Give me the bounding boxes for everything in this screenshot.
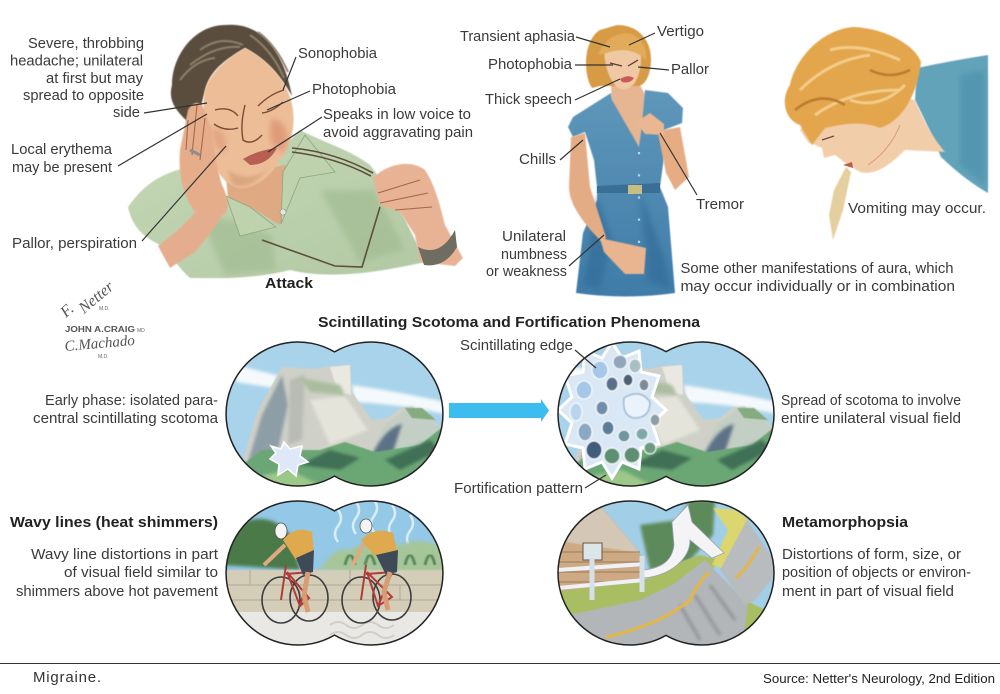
label: headache: [10, 36, 144, 121]
leader lines: attack: [118, 57, 322, 241]
shirt button: [280, 209, 286, 215]
face: [204, 48, 294, 188]
hair: [785, 27, 921, 145]
label: sonophobia: Sonophobia: [298, 46, 378, 62]
right arm: [658, 127, 689, 190]
signatures: M.D.: [98, 354, 109, 360]
facial features: [610, 60, 638, 66]
road texture: [680, 585, 735, 640]
trees: [222, 519, 300, 570]
label: pallor, perspiration: Pallor, perspiration: [12, 236, 137, 252]
text: wavy lines description: of visual field similar to: [64, 565, 218, 581]
label: spread of scotoma: Spread of scotoma to involve: [781, 393, 961, 409]
bangs: [598, 33, 646, 60]
hair strands: [800, 48, 905, 115]
lens: early scotoma: [225, 341, 444, 487]
neck and face: [800, 99, 945, 173]
leader lines: scotoma: [575, 350, 606, 488]
signatures: Netter: [75, 278, 118, 318]
panel: aura manifestations: [460, 24, 988, 296]
text: metamorphopsia description: ment in part of visual field: [782, 584, 954, 600]
label: photophobia: Photophobia: [312, 82, 397, 98]
buttons: [638, 152, 640, 272]
label: headache: spread to opposite: [23, 88, 144, 104]
label: chills: Chills: [519, 152, 556, 168]
panel: wavy lines: [10, 495, 450, 652]
label: headache: Severe, throbbing: [28, 36, 144, 52]
shrubs: [320, 541, 445, 575]
label: spread of scotoma: [781, 393, 961, 427]
label: thick speech: Thick speech: [485, 92, 572, 108]
signatures: JOHN A.CRAIG: [65, 325, 135, 334]
hair: [171, 25, 292, 122]
signatures: [57, 278, 145, 360]
figure title: Migraine.: [33, 669, 101, 686]
panel: metamorphopsia: [550, 495, 971, 652]
label: local erythema: Local erythema: [11, 142, 113, 158]
text: wavy lines description: [16, 547, 218, 600]
label: low voice: avoid aggravating pain: [323, 125, 473, 141]
source: Source: Netter's Neurology, 2nd Edition: [763, 672, 995, 686]
white rail: [644, 505, 724, 578]
caption: aura: Some other manifestations of aura, which: [680, 261, 954, 277]
label: unilateral numbness or weakness: or weakness: [486, 264, 567, 280]
signatures: MD: [137, 328, 145, 334]
cyclist one: [262, 523, 328, 623]
dress: [568, 90, 683, 296]
label: transient aphasia: Transient aphasia: [460, 29, 576, 45]
text: metamorphopsia description: Distortions of form, size, or: [782, 547, 961, 563]
belt: [597, 183, 660, 193]
label: vertigo: Vertigo: [657, 24, 704, 40]
left arm: [569, 133, 606, 244]
lens: cyclists: [225, 500, 444, 646]
lower hand: [600, 238, 646, 274]
dress: [915, 55, 988, 193]
label: photophobia: Photophobia: [488, 57, 573, 73]
illustration: standing woman in blue dress: [568, 25, 689, 296]
label: unilateral numbness or weakness: Unilateral: [502, 229, 566, 245]
label: low voice: [323, 107, 473, 141]
label: early phase: Early phase: isolated para-: [45, 393, 218, 409]
arrow: [449, 399, 549, 422]
heading: scintillating scotoma: Scintillating Scotoma and Fortification Phenomena: [318, 315, 701, 331]
heading: wavy lines: Wavy lines (heat shimmers): [10, 515, 218, 531]
stone wall: [220, 570, 450, 614]
neck: [226, 165, 297, 225]
fortification cells: [570, 355, 660, 464]
label: early phase: central scintillating scotoma: [33, 411, 219, 427]
panel: attack: [10, 25, 473, 292]
text: metamorphopsia description: position of objects or environ-: [782, 565, 971, 581]
footer: [0, 664, 1000, 686]
label: headache: headache; unilateral: [10, 54, 143, 70]
label: headache: at first but may: [46, 71, 144, 87]
label: vomiting: Vomiting may occur.: [848, 201, 986, 217]
label: spread of scotoma: entire unilateral visual field: [781, 411, 961, 427]
text: wavy lines description: Wavy line distortions in part: [31, 547, 218, 563]
road: [572, 560, 748, 644]
fortification star: [558, 342, 666, 478]
caption: attack: Attack: [265, 276, 314, 292]
scotoma star: [270, 442, 308, 476]
shirt shading: [200, 190, 405, 275]
panel: early phase: [34, 341, 444, 487]
forearm: [158, 208, 226, 268]
illustration: woman vomiting: [785, 27, 988, 240]
signatures: F.: [57, 300, 77, 322]
label: early phase: [33, 393, 219, 427]
fence: [558, 564, 644, 588]
pavement: [238, 612, 430, 644]
hair highlights: [180, 32, 288, 80]
caption: aura: may occur individually or in combination: [680, 279, 955, 295]
road markings: [606, 547, 759, 637]
shirt: [128, 130, 425, 278]
text: metamorphopsia description: [782, 547, 971, 600]
heading: metamorphopsia: Metamorphopsia: [782, 515, 909, 531]
label: tremor: Tremor: [696, 197, 744, 213]
hair: [586, 25, 651, 88]
raised hand: [373, 164, 463, 266]
label: unilateral numbness or weakness: numbness: [501, 247, 567, 263]
label: headache: side: [113, 105, 140, 121]
label: fortification pattern: Fortification pattern: [454, 481, 583, 497]
facial features: [214, 90, 284, 142]
collar: [226, 135, 335, 236]
signatures: M.D.: [99, 306, 110, 312]
bracelet: [418, 230, 457, 265]
label: local erythema: [11, 142, 113, 176]
grass verge: [555, 555, 720, 618]
label: local erythema: may be present: [12, 160, 112, 176]
cyclist two: [342, 519, 411, 623]
caption: aura: [680, 261, 955, 295]
lens: distorted road and house: [557, 500, 775, 646]
trees: [640, 500, 715, 570]
label: low voice: Speaks in low voice to: [323, 107, 471, 123]
lens: spread scotoma: [557, 341, 775, 487]
hand on chest: [636, 113, 664, 135]
neck and chest: [611, 85, 648, 150]
face: [604, 47, 641, 89]
label: scintillating edge: Scintillating edge: [460, 338, 573, 354]
house: [558, 508, 641, 592]
text: wavy lines description: shimmers above hot pavement: [16, 584, 218, 600]
leader lines: aura: [560, 33, 697, 266]
glasses: [262, 148, 380, 267]
panel: scotoma spread: [454, 335, 961, 500]
signatures: C.Machado: [64, 333, 136, 355]
hand on temple: [180, 103, 228, 215]
illustration: woman with migraine attack: [128, 25, 463, 278]
label: unilateral numbness or weakness: [486, 229, 567, 280]
vomit: [829, 167, 851, 240]
label: pallor: Pallor: [671, 62, 709, 78]
